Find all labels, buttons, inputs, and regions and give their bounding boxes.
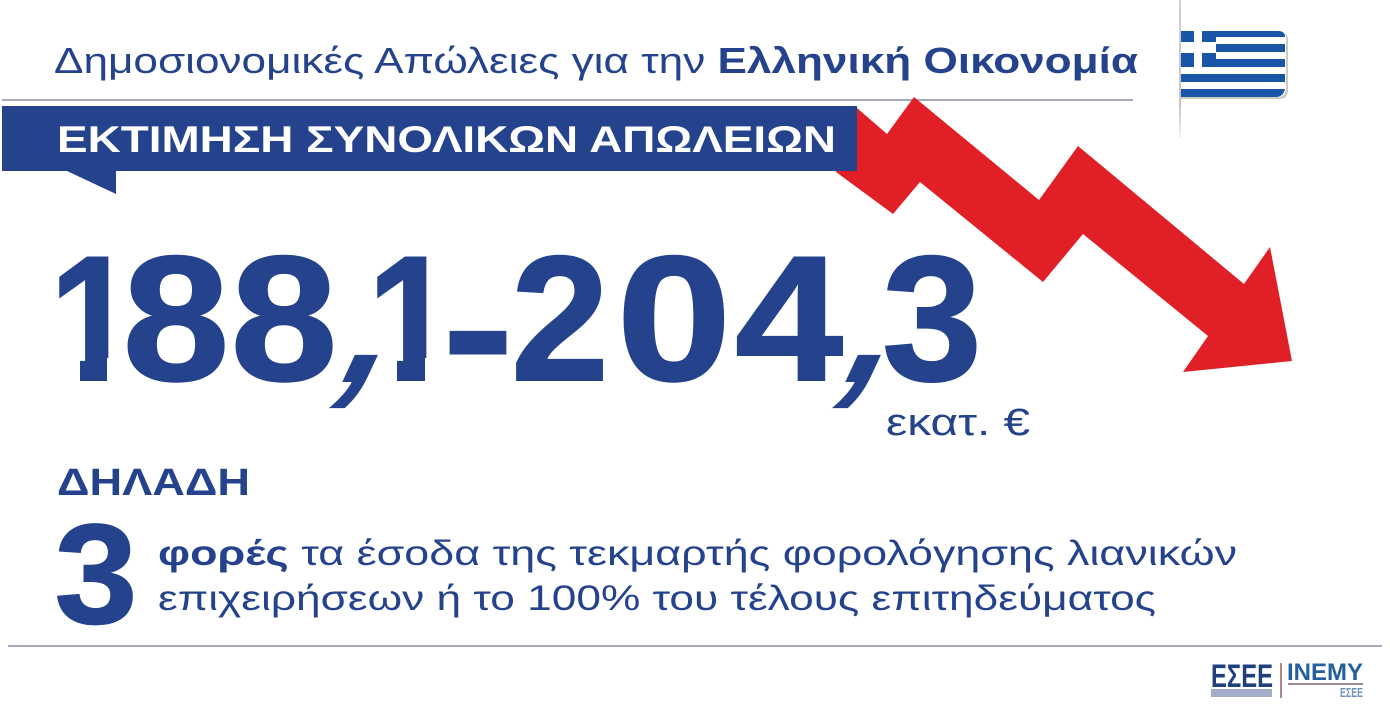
big number: , <box>819 228 950 417</box>
description text: επιχειρήσεων ή το 100% του τέλους επιτηδεύματος <box>158 579 1156 618</box>
unit label: εκατ. € <box>886 402 1030 444</box>
big number: 2 <box>511 219 609 418</box>
description text <box>158 534 1237 618</box>
arrow: falling red zigzag <box>836 97 1292 372</box>
big number: 8 <box>231 220 337 418</box>
subheading: ΔΗΛΑΔΗ <box>57 462 250 504</box>
icon: Greek flag <box>1179 0 1288 138</box>
logos: ESEE and INEMY <box>1211 658 1363 700</box>
big number: 1 <box>367 219 455 418</box>
big number: 4 <box>735 219 843 418</box>
logos: ESEE and INEMY: ΕΣΕΕ <box>1340 685 1363 700</box>
banner: speech bubble heading <box>2 106 857 194</box>
big number: – <box>447 208 509 446</box>
banner: speech bubble heading: ΕΚΤΙΜΗΣΗ ΣΥΝΟΛΙΚΩΝ ΑΠΩΛΕΙΩΝ <box>57 119 836 160</box>
description text: φορές τα έσοδα της τεκμαρτής φορολόγησης λιανικών <box>158 534 1237 573</box>
big number <box>35 208 982 446</box>
big number: 8 <box>123 220 229 418</box>
big number: 0 <box>617 218 731 418</box>
logos: ESEE and INEMY: ΕΣΕΕ <box>1211 658 1273 694</box>
title: Δημοσιονομικές Απώλειες για την Ελληνική Οικονομία <box>54 40 1138 81</box>
big number: 1 <box>49 219 137 418</box>
logos: ESEE and INEMY: ΙΝΕΜΥ <box>1287 659 1363 686</box>
big numeral 3: 3 <box>55 494 137 653</box>
big number: , <box>316 228 447 417</box>
big number: 3 <box>882 219 982 418</box>
